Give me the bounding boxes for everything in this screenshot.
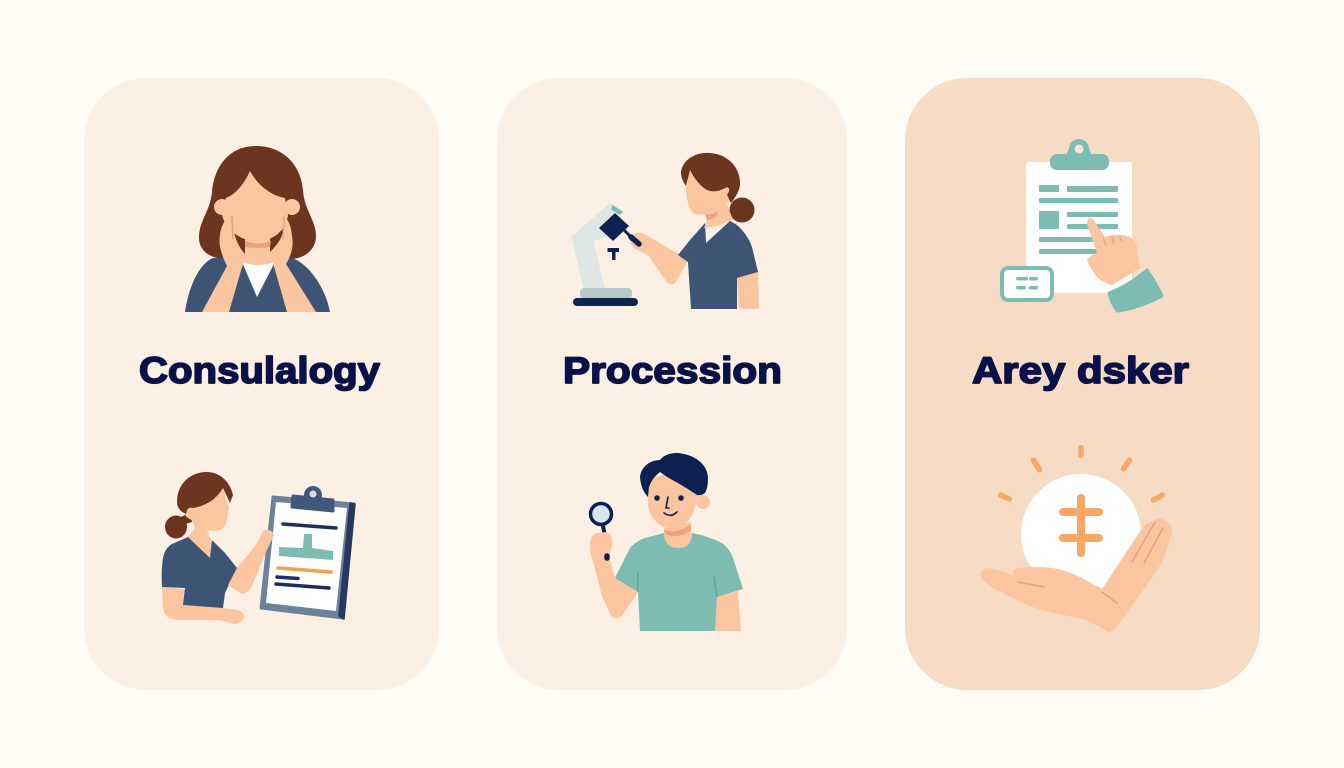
panel: arey dsker — [905, 78, 1260, 690]
heading: Procession: Procession — [563, 349, 782, 391]
icon: woman holding her face — [185, 146, 330, 312]
heading: Arey dsker: Arey dsker — [972, 349, 1189, 391]
card background — [84, 78, 439, 690]
icon: man with magnifier — [590, 453, 743, 631]
icon: nurse with clipboard — [162, 472, 355, 624]
icon: clipboard with pointing hand — [1002, 139, 1162, 311]
icon: woman at microscope — [573, 153, 759, 309]
card background — [497, 78, 847, 690]
panel: procession — [497, 78, 847, 690]
panel: consulalogy — [84, 78, 439, 690]
heading: Consulalogy: Consulalogy — [139, 349, 380, 391]
icon: hand holding glowing orb — [980, 448, 1172, 632]
card background — [905, 78, 1260, 690]
